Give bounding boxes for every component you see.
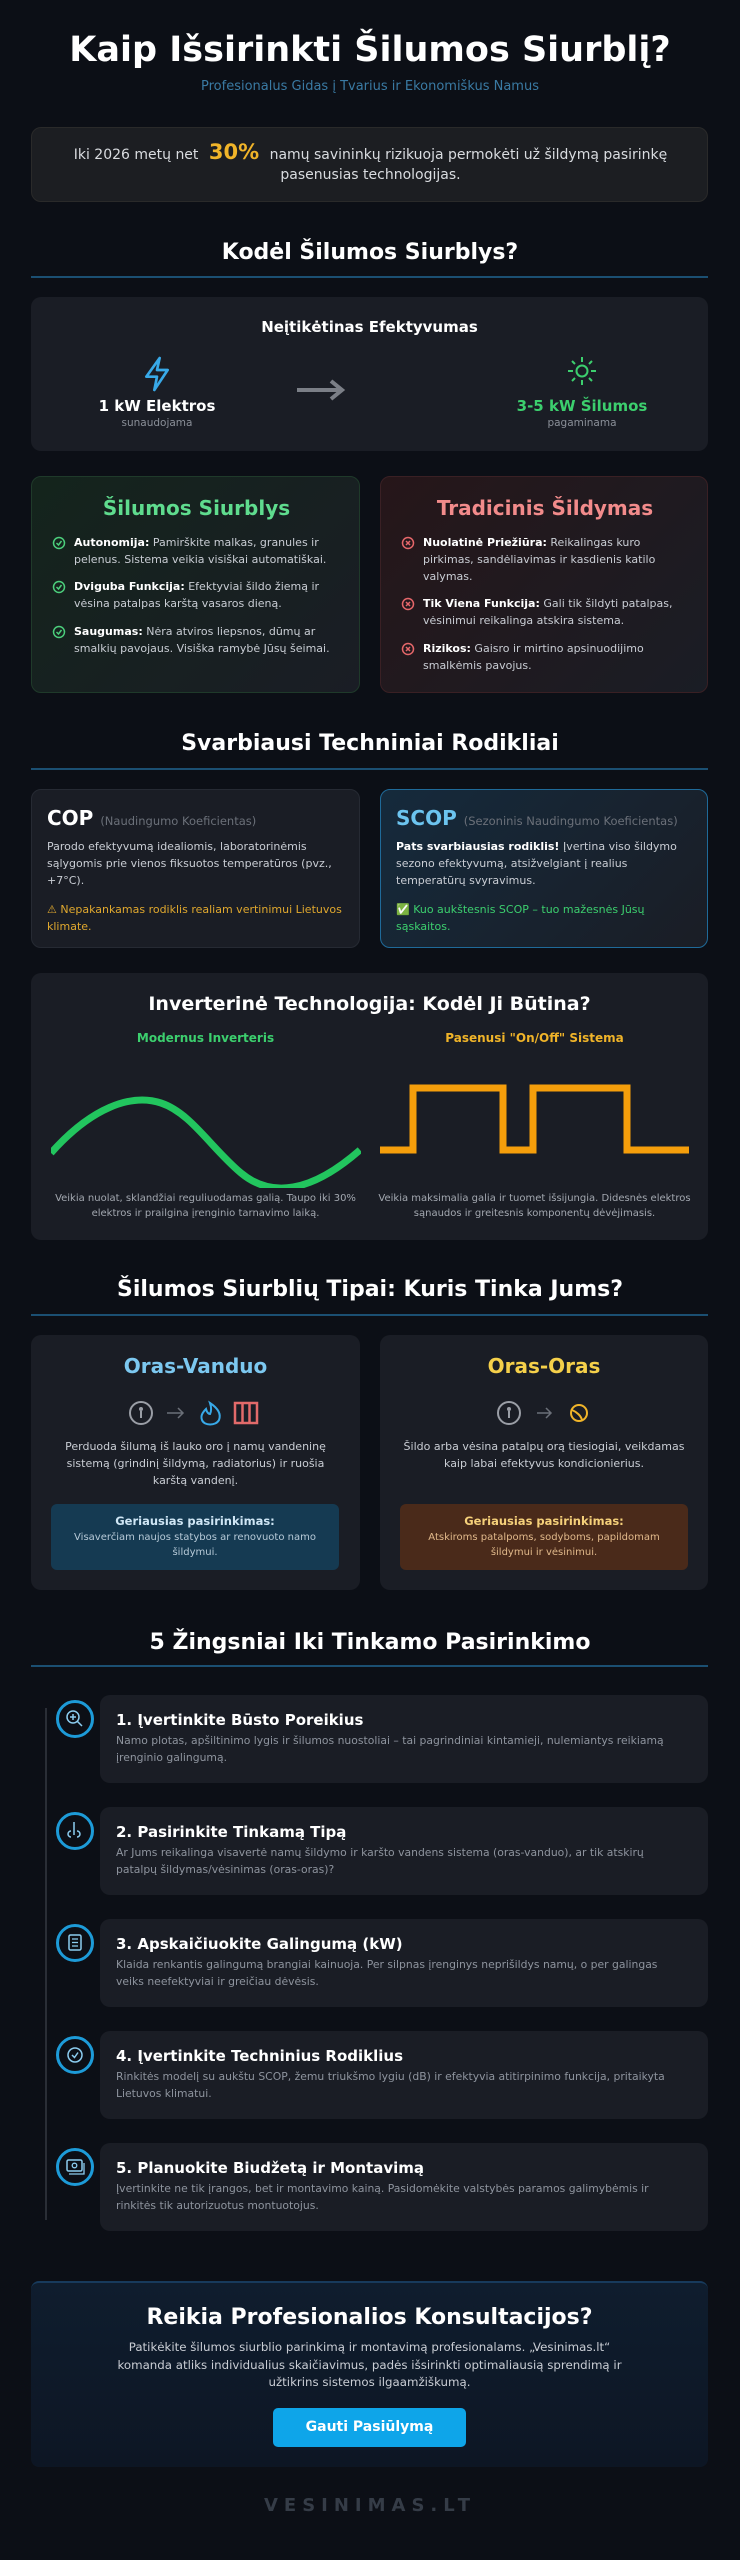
panel: COP: COP (Naudingumo Koeficientas) — [47, 806, 256, 830]
panel: inverter: Inverterinė Technologija: Kodėl Ji Būtina? — [148, 993, 591, 1015]
panel: COP: ⚠ Nepakankamas rodiklis realiam vertinimui Lietuvos klimate. — [47, 903, 342, 933]
title: Kaip Išsirinkti Šilumos Siurblį? — [69, 30, 671, 70]
step 5: Įvertinkite ne tik įrangos, bet ir montavimo kainą. Pasidomėkite valstybės paramos galimybėmis ir rinkitės tik autorizuotus montuotojus. — [116, 2182, 649, 2212]
callout: best choice — [51, 1504, 339, 1570]
label: heat: 3-5 kW Šilumos — [517, 397, 647, 415]
label: electricity — [99, 397, 215, 429]
panel: efficiency — [31, 297, 708, 451]
icons — [497, 1401, 588, 1425]
item: Autonomija: Pamirškite malkas, granules ir pelenus. Sistema veikia visiškai automatiškai. — [74, 536, 326, 566]
step 4: 4. Įvertinkite Techninius Rodiklius — [116, 2047, 403, 2065]
chart: sine wave — [51, 1096, 361, 1188]
chart: square wave — [380, 1084, 689, 1154]
panel: air-air — [380, 1335, 708, 1590]
panel: air-water — [31, 1335, 360, 1590]
panel: heat pump pros: Šilumos Siurblys — [103, 496, 290, 520]
panel: air-water: Perduoda šilumą iš lauko oro į namų vandeninę sistemą (grindinį šildymą, radiatorius) ir ruošia karštą vandenį. — [65, 1440, 326, 1487]
panel: inverter: Pasenusi "On/Off" Sistema — [445, 1031, 624, 1045]
heading: why: Kodėl Šilumos Siurblys? — [222, 240, 518, 265]
panel: inverter: Veikia nuolat, sklandžiai reguliuodamas galią. Taupo iki 30% elektros ir prailgina įrenginio tarnavimo laiką. — [55, 1193, 356, 1219]
panel: traditional cons — [380, 476, 708, 693]
panel: air-water: Oras-Vanduo — [124, 1354, 267, 1378]
step 1: Namo plotas, apšiltinimo lygis ir šilumos nuostoliai – tai pagrindiniai kintamieji, nulemiantys reikiamą įrenginio galingumą. — [116, 1734, 664, 1764]
panel: traditional cons: Tradicinis Šildymas — [437, 496, 653, 520]
panel: SCOP — [380, 789, 708, 948]
label: heat: pagaminama — [547, 417, 617, 429]
step 2 — [56, 1807, 708, 1895]
panel: SCOP: SCOP (Sezoninis Naudingumo Koeficientas) — [396, 806, 678, 830]
item: Nuolatinė Priežiūra: Reikalingas kuro pirkimas, sandėliavimas ir kasdienis katilo valymas. — [423, 536, 655, 583]
panel: inverter: Veikia maksimalia galia ir tuomet išsijungia. Didesnės elektros sąnaudos ir greitesnis komponentų dėvėjimasis. — [378, 1193, 691, 1219]
button: Gauti Pasiūlymą — [306, 2419, 433, 2435]
panel: COP: Parodo efektyvumą idealiomis, laboratorinėmis sąlygomis prie vienos fiksuotos temperatūros (pvz., +7°C). — [47, 840, 332, 887]
callout: best choice: Atskiroms patalpoms, sodyboms, papildomam šildymui ir vėsinimui. — [428, 1532, 660, 1558]
callout: best choice: Visaverčiam naujos statybos ar renovuoto namo šildymui. — [74, 1532, 316, 1558]
step 1 — [56, 1695, 708, 1783]
panel: CTA — [31, 2281, 708, 2467]
item: Tik Viena Funkcija: Gali tik šildyti patalpas, vėsinimui reikalinga atskira sistema. — [423, 597, 672, 627]
panel: inverter: Modernus Inverteris — [137, 1031, 274, 1045]
panel: CTA: Patikėkite šilumos siurblio parinkimą ir montavimą profesionalams. „Vesinimas.lt“ komanda atliks individualius skaičiavimus, padės išsirinkti optimaliausią sprendimą ir užtikrins sistemos ilgaamžiškumą. — [117, 2340, 622, 2389]
panel: SCOP: Pats svarbiausias rodiklis! Įvertina viso šildymo sezono efektyvumą, atsižvelgiant į realius temperatūrų svyravimus. — [396, 840, 677, 887]
panel: air-air: Oras-Oras — [488, 1354, 600, 1378]
step 3: 3. Apskaičiuokite Galingumą (kW) — [116, 1935, 403, 1953]
step 2: Ar Jums reikalinga visavertė namų šildymo ir karšto vandens sistema (oras-vanduo), ar tik atskirų patalpų šildymas/vėsinimas (oras-oras)? — [116, 1846, 644, 1876]
panel: CTA: Reikia Profesionalios Konsultacijos? — [146, 2305, 593, 2330]
panel: SCOP: ✅ Kuo aukštesnis SCOP – tuo mažesnės Jūsų sąskaitos. — [396, 903, 645, 933]
panel: efficiency: Neįtikėtinas Efektyvumas — [261, 318, 478, 336]
subtitle: Profesionalus Gidas į Tvarius ir Ekonomiškus Namus — [201, 79, 539, 94]
panel: heat pump pros — [31, 476, 360, 693]
stat callout: Iki 2026 metų net 30% namų savininkų rizikuoja permokėti už šildymą pasirinkę — [74, 140, 667, 164]
step 3 — [56, 1919, 708, 2007]
footer: VESINIMAS.LT — [264, 2495, 476, 2516]
callout: best choice: Geriausias pasirinkimas: — [115, 1514, 275, 1528]
panel: air-air: Šildo arba vėsina patalpų orą tiesiogiai, veikdamas kaip labai efektyvus kondicionierius. — [404, 1440, 684, 1470]
icons — [129, 1400, 258, 1426]
step 4 — [56, 2031, 708, 2119]
heading: tech: Svarbiausi Techniniai Rodikliai — [181, 731, 559, 756]
step 4: Rinkitės modelį su aukštu SCOP, žemu triukšmo lygiu (dB) ir efektyvia atitirpinimo funkcija, pritaikyta Lietuvos klimatui. — [116, 2070, 665, 2100]
step 5 — [56, 2143, 708, 2231]
item: Rizikos: Gaisro ir mirtino apsinuodijimo smalkėmis pavojus. — [423, 642, 644, 672]
label: electricity: 1 kW Elektros — [99, 397, 215, 415]
timeline line — [45, 1708, 47, 2220]
label: electricity: sunaudojama — [122, 417, 192, 429]
panel: inverter — [31, 973, 708, 1240]
item: Saugumas: Nėra atviros liepsnos, dūmų ar smalkių pavojaus. Visiška ramybė Jūsų šeimai. — [74, 625, 330, 655]
item: Dviguba Funkcija: Efektyviai šildo žiemą ir vėsina patalpas karštą vasaros dieną. — [74, 580, 319, 610]
label: heat — [517, 396, 647, 429]
stat callout — [31, 127, 708, 202]
heading: types: Šilumos Siurblių Tipai: Kuris Tinka Jums? — [117, 1277, 623, 1302]
button — [273, 2408, 466, 2447]
icon: sun — [568, 357, 596, 385]
heading: steps: 5 Žingsniai Iki Tinkamo Pasirinkimo — [150, 1630, 590, 1655]
step 1: 1. Įvertinkite Būsto Poreikius — [116, 1711, 363, 1729]
callout: best choice — [400, 1504, 688, 1570]
step 3: Klaida renkantis galingumą brangiai kainuoja. Per silpnas įrenginys neprišildys namų, o per galingas veiks neefektyviai ir greičiau dėvėsis. — [116, 1958, 657, 1988]
step 2: 2. Pasirinkite Tinkamą Tipą — [116, 1823, 346, 1841]
step 5: 5. Planuokite Biudžetą ir Montavimą — [116, 2159, 424, 2177]
arrow — [297, 380, 345, 400]
icon: bolt — [144, 356, 170, 392]
panel: COP — [31, 789, 360, 948]
callout: best choice: Geriausias pasirinkimas: — [464, 1514, 624, 1528]
stat callout: pasenusias technologijas. — [280, 167, 461, 183]
